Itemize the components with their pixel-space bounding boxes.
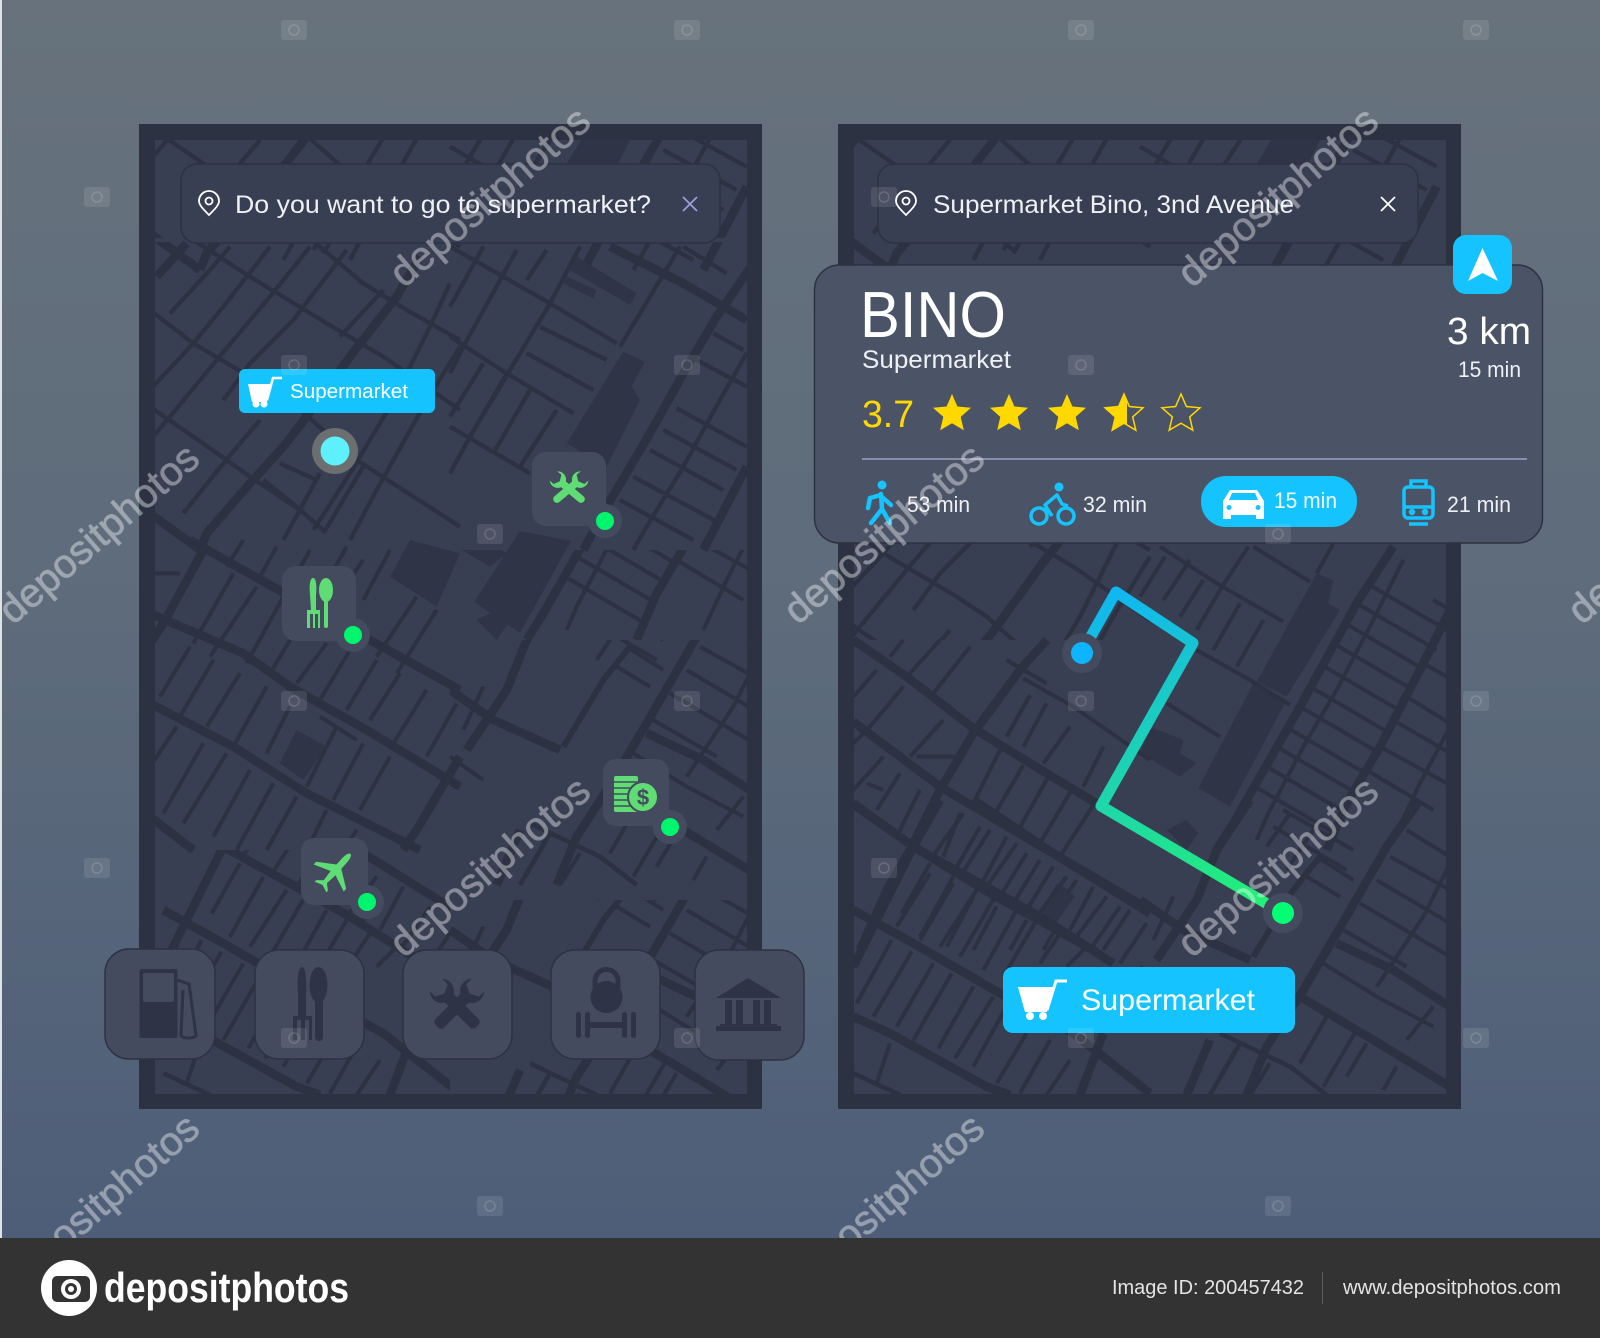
time text: 15 min	[1274, 488, 1337, 513]
poi: restaurant	[282, 566, 370, 652]
time text: 32 min	[1083, 492, 1147, 517]
watermarks: depositphotos	[775, 435, 993, 633]
poi: repair	[532, 452, 622, 538]
transport: bike	[1031, 482, 1147, 524]
icon: location pin	[896, 191, 916, 215]
poi: airport	[301, 838, 384, 919]
icon: fork and spoon	[307, 578, 333, 628]
watermarks: depositphotos	[1169, 768, 1387, 966]
distance: 3 km	[1447, 311, 1531, 353]
time text: 21 min	[1447, 492, 1511, 517]
category: fuel	[105, 949, 215, 1059]
destination text: Supermarket Bino, 3nd Avenue	[933, 191, 1294, 219]
panel: right map	[838, 124, 1461, 1109]
icon: fuel pump	[140, 969, 196, 1038]
current location marker	[312, 428, 358, 474]
time text: 53 min	[907, 492, 970, 517]
icon: kettlebell and dumbbell	[576, 970, 636, 1038]
transport: train	[1404, 481, 1511, 524]
image id: Image ID: 200457432	[1112, 1277, 1304, 1299]
search bar: left	[181, 164, 720, 243]
route end marker	[1263, 893, 1303, 933]
icon: coins: $	[637, 785, 649, 810]
footer logo text: depositphotos	[104, 1264, 349, 1311]
watermarks: depositphotos	[1169, 98, 1387, 296]
category: bank	[695, 950, 804, 1060]
search text: Do you want to go to supermarket?	[235, 191, 651, 219]
icon: cart	[1018, 981, 1067, 1020]
poi: bank coins	[603, 759, 687, 844]
icon: close	[683, 197, 697, 211]
icon: wrenches	[427, 976, 487, 1035]
destination label	[1003, 967, 1295, 1033]
label text: Supermarket	[1081, 984, 1256, 1017]
icon: car	[1223, 490, 1264, 519]
tag text: Supermarket	[290, 381, 408, 403]
store category: Supermarket	[862, 346, 1011, 374]
category: tools	[403, 950, 512, 1059]
icon: location pin	[199, 191, 219, 215]
marker dot	[350, 885, 384, 919]
transport: walk	[868, 480, 970, 523]
watermarks: depositphotos	[381, 768, 599, 966]
rating stars	[933, 394, 1200, 430]
marker dot	[653, 810, 687, 844]
icon: close	[1381, 197, 1395, 211]
store name: BINO	[860, 278, 1006, 351]
icon: train	[1404, 481, 1433, 524]
footer bar	[0, 1238, 1600, 1338]
transport: car selected	[1201, 476, 1357, 527]
watermarks: depositphotos	[775, 1105, 993, 1303]
marker dot	[336, 618, 370, 652]
category: gym	[551, 950, 660, 1059]
category: food	[255, 950, 364, 1059]
supermarket tag on left map	[239, 369, 435, 413]
watermark camera marks	[84, 20, 1489, 1216]
panel: left map	[139, 124, 762, 1109]
icon: plane	[306, 840, 365, 901]
icon: bicycle	[1031, 482, 1074, 524]
icon: cart	[248, 378, 282, 408]
panel: store details card	[814, 235, 1542, 543]
route line	[1090, 592, 1269, 905]
duration: 15 min	[1458, 357, 1521, 382]
icon: bank building	[716, 978, 781, 1031]
website: www.depositphotos.com	[1342, 1277, 1561, 1299]
icon: walking person	[868, 480, 891, 523]
footer logo mark	[41, 1260, 97, 1316]
navigate button	[1453, 235, 1512, 294]
route start marker	[1062, 633, 1102, 673]
rating value: 3.7	[862, 394, 914, 436]
marker dot	[588, 504, 622, 538]
icon: fork and spoon	[293, 967, 328, 1041]
search bar: right	[878, 164, 1418, 243]
icon: wrench and spanner	[548, 470, 590, 508]
watermarks: depositphotos	[381, 98, 599, 296]
